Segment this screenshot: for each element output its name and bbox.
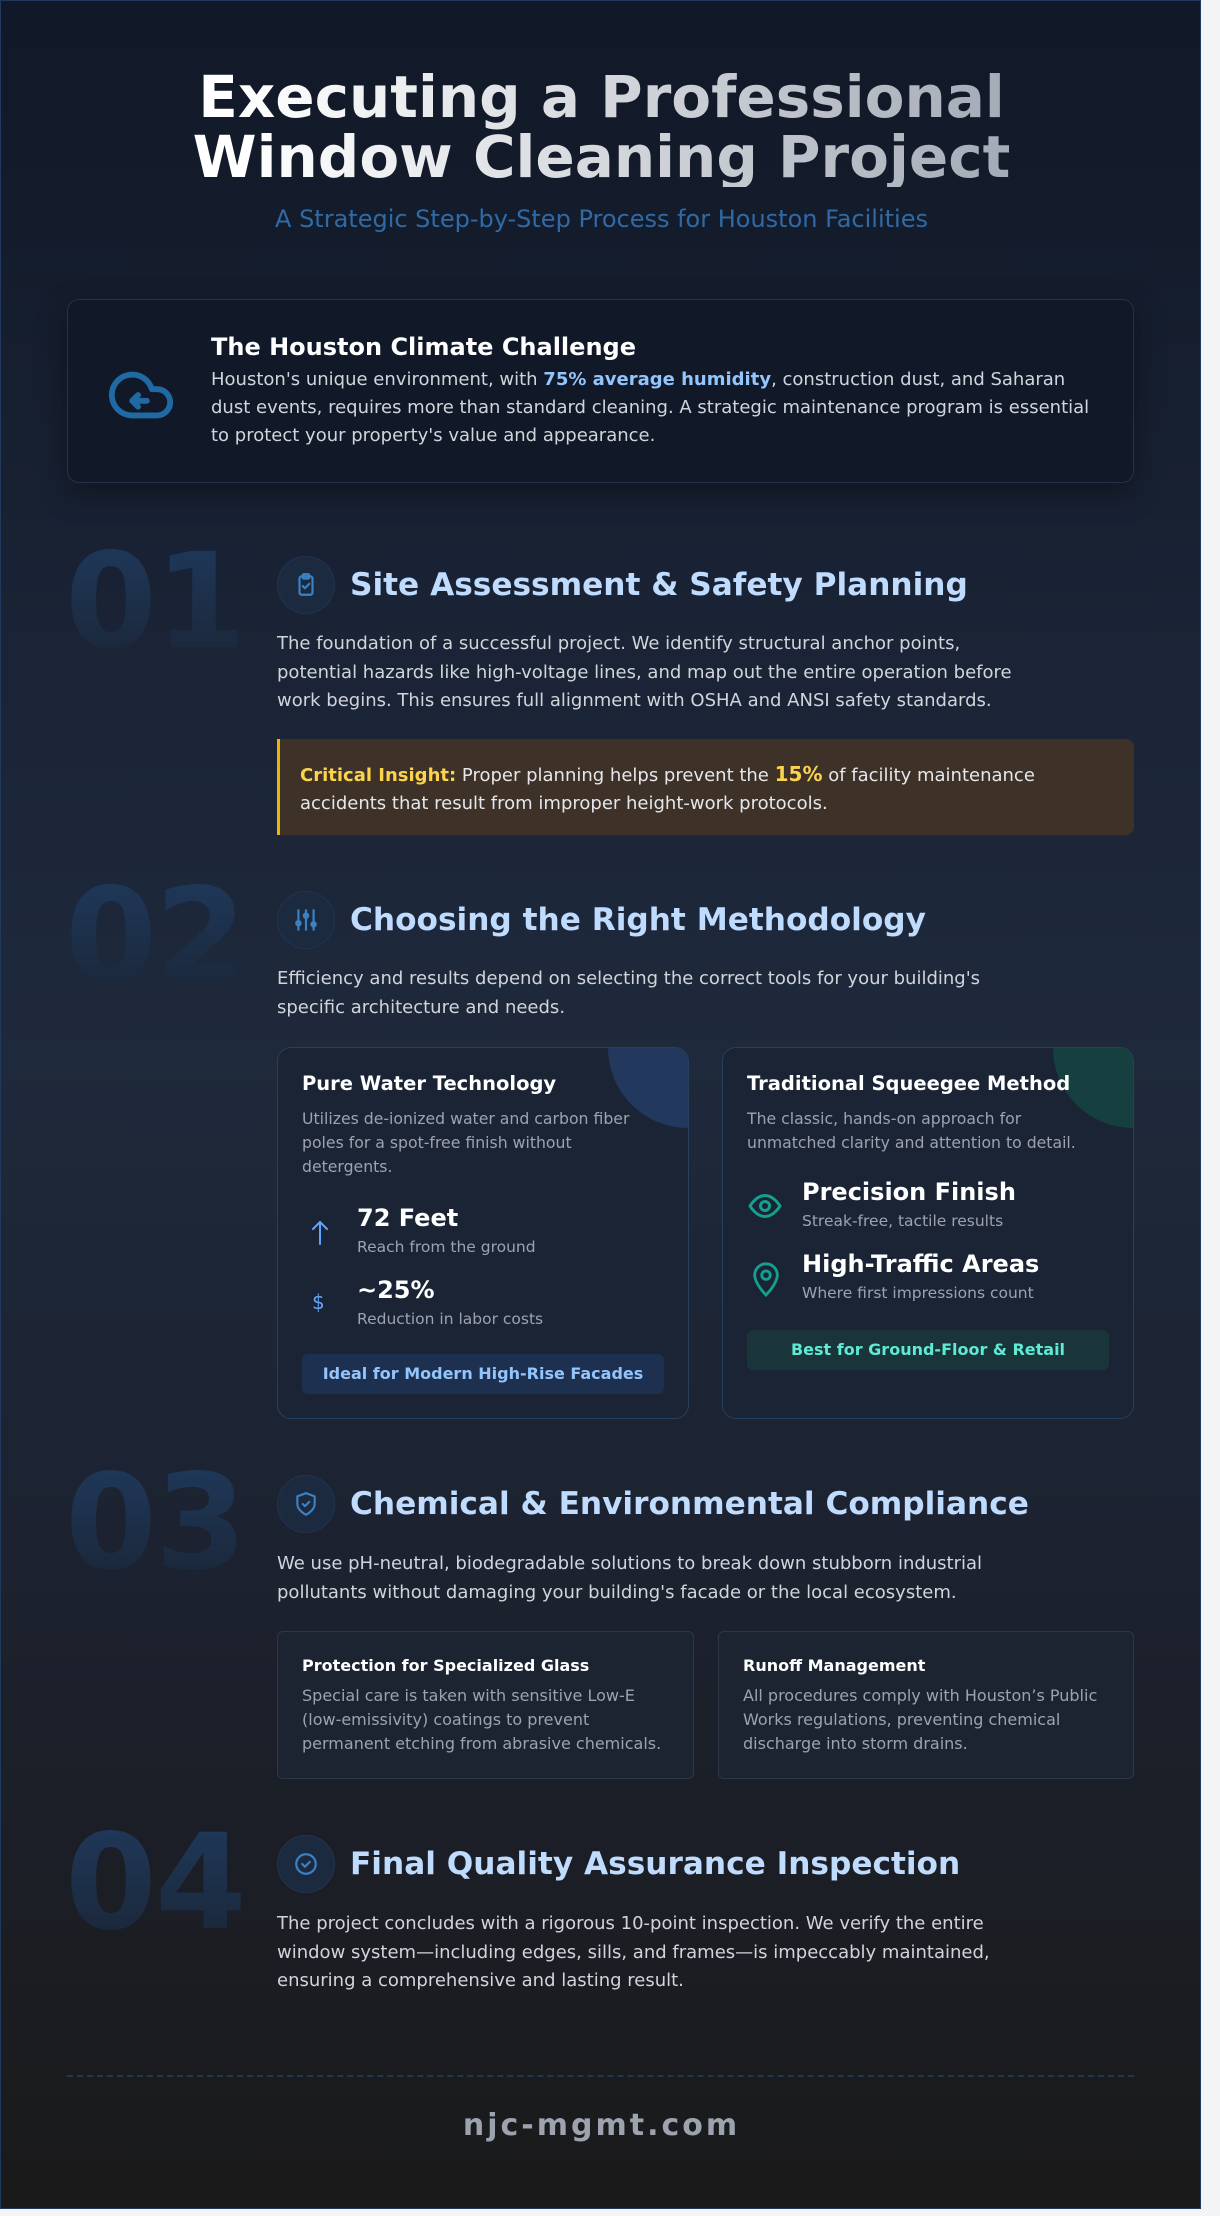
card title: Pure Water Technology — [302, 1072, 556, 1095]
section 04 number: 04 — [65, 1806, 245, 1960]
text 01: The foundation of a successful project. We identify structural anchor points, — [277, 633, 960, 654]
text 04 — [276, 1913, 990, 1991]
panel: pure water technology — [277, 1047, 689, 1419]
heading 04: Final Quality Assurance Inspection — [350, 1846, 960, 1882]
panel: runoff management: All procedures comply with Houston’s Public — [743, 1686, 1097, 1705]
section 03 number: 03 — [65, 1446, 245, 1600]
card description — [746, 1109, 1076, 1152]
card description: unmatched clarity and attention to detail. — [747, 1133, 1076, 1152]
text 02: specific architecture and needs. — [277, 996, 565, 1018]
text 01 — [276, 633, 1012, 711]
stat: 25%: ~25% — [357, 1276, 435, 1304]
panel: specialized glass: (low-emissivity) coatings to prevent — [302, 1710, 589, 1729]
icon: cloud — [108, 372, 174, 418]
title: Executing a Professional — [198, 63, 1005, 131]
feature: precision finish: Precision Finish — [802, 1178, 1016, 1206]
icon: shield — [277, 1475, 335, 1533]
text 01: work begins. This ensures full alignment with OSHA and ANSI safety standards. — [277, 690, 992, 711]
callout: critical insight: accidents that result from improper height-work protocols. — [300, 793, 828, 814]
badge: Ideal for Modern High-Rise Facades — [323, 1364, 643, 1383]
stat: 72 feet — [312, 1204, 536, 1256]
feature: precision finish: Streak-free, tactile results — [802, 1212, 1003, 1230]
panel: specialized glass: permanent etching from abrasive chemicals. — [302, 1734, 661, 1753]
feature: precision finish — [748, 1178, 1016, 1230]
text — [211, 369, 1089, 446]
panel: runoff management — [718, 1631, 1134, 1779]
panel: runoff management: Runoff Management — [743, 1656, 925, 1675]
section 01 number: 01 — [65, 525, 245, 679]
stat: 25% — [312, 1276, 543, 1328]
text 04: window system—including edges, sills, and frames—is impeccably maintained, — [277, 1942, 990, 1962]
panel: specialized glass — [277, 1631, 694, 1779]
title: Window Cleaning Project — [193, 123, 1010, 191]
badge — [302, 1354, 664, 1394]
text 01: potential hazards like high-voltage lines, and map out the entire operation before — [277, 662, 1012, 682]
text: to protect your property's value and appearance. — [211, 425, 655, 446]
badge: Best for Ground-Floor & Retail — [791, 1340, 1065, 1359]
text 02 — [277, 968, 980, 1018]
text: dust events, requires more than standard cleaning. A strategic maintenance program is essential — [211, 397, 1089, 418]
heading 01: Site Assessment & Safety Planning — [350, 567, 968, 603]
card description: poles for a spot-free finish without — [302, 1133, 572, 1152]
stat: 25%: Reduction in labor costs — [357, 1310, 543, 1328]
feature: high-traffic areas: Where first impressions count — [802, 1284, 1034, 1302]
panel: runoff management: Works regulations, preventing chemical — [743, 1710, 1060, 1729]
icon: check circle — [277, 1835, 335, 1893]
card description: The classic, hands-on approach for — [747, 1109, 1021, 1128]
panel: runoff management: discharge into storm drains. — [743, 1734, 968, 1753]
panel: traditional squeegee — [722, 1047, 1134, 1419]
icon: sliders — [277, 891, 335, 949]
text 04: ensuring a comprehensive and lasting result. — [277, 1970, 684, 1991]
feature: high-traffic areas — [753, 1250, 1039, 1302]
badge — [747, 1330, 1109, 1370]
card description: detergents. — [302, 1157, 392, 1176]
panel: climate challenge — [67, 299, 1134, 483]
stat: 25%: $ — [312, 1290, 325, 1314]
text 02: Efficiency and results depend on selecting the correct tools for your building's — [277, 968, 980, 989]
callout: critical insight — [277, 739, 1134, 835]
subtitle: A Strategic Step-by-Step Process for Houston Facilities — [275, 205, 928, 233]
heading: The Houston Climate Challenge — [211, 333, 636, 361]
text 03: pollutants without damaging your building's facade or the local ecosystem. — [277, 1582, 957, 1602]
section 02 number: 02 — [65, 860, 245, 1014]
title — [1, 67, 1202, 187]
callout: critical insight: Critical Insight: Proper planning helps prevent the 15% of facility maintenance — [300, 762, 1035, 786]
text 03 — [277, 1553, 982, 1602]
footer: njc-mgmt.com — [463, 2108, 740, 2143]
card description — [302, 1109, 630, 1176]
stat: 72 feet: 72 Feet — [357, 1204, 458, 1232]
heading 03: Chemical & Environmental Compliance — [350, 1486, 1029, 1522]
card title: Traditional Squeegee Method — [747, 1072, 1070, 1095]
stat: 72 feet: Reach from the ground — [357, 1238, 536, 1256]
panel: specialized glass: Special care is taken with sensitive Low-E — [302, 1686, 635, 1705]
heading 02: Choosing the Right Methodology — [350, 902, 926, 938]
text: Houston's unique environment, with 75% average humidity, construction dust, and Saharan — [211, 369, 1065, 390]
text 03: We use pH-neutral, biodegradable solutions to break down stubborn industrial — [277, 1553, 982, 1574]
feature: high-traffic areas: High-Traffic Areas — [802, 1250, 1039, 1278]
icon: clipboard — [277, 556, 335, 614]
text 04: The project concludes with a rigorous 10-point inspection. We verify the entire — [277, 1913, 984, 1934]
card description: Utilizes de-ionized water and carbon fiber — [302, 1109, 629, 1128]
panel: specialized glass: Protection for Specialized Glass — [302, 1656, 589, 1675]
